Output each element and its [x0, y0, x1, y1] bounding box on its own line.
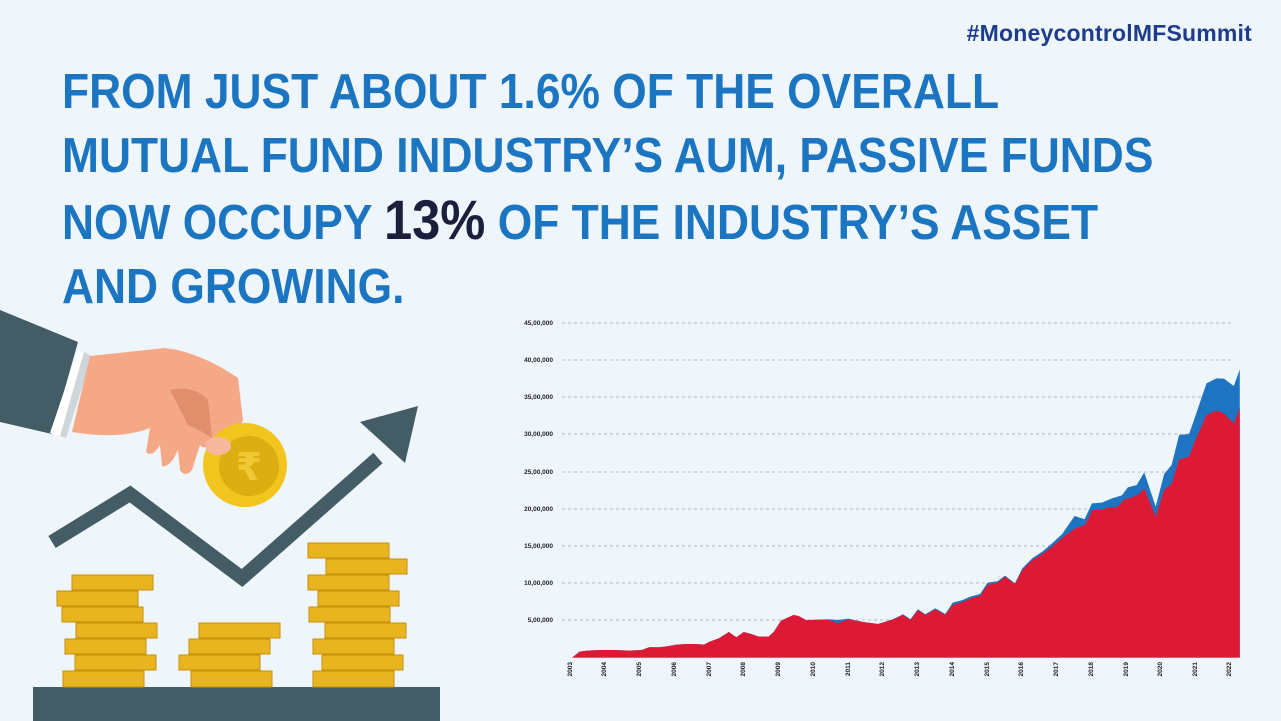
icon: trend arrow	[52, 406, 418, 578]
title: NOW OCCUPY 13% OF THE INDUSTRY’S ASSET	[62, 188, 1098, 251]
x axis labels: 2020	[1157, 662, 1164, 676]
x axis labels: 2011	[845, 662, 852, 676]
y axis labels: 35,00,000	[524, 394, 553, 401]
y axis labels: 25,00,000	[524, 469, 553, 476]
y axis labels: 20,00,000	[524, 506, 553, 513]
x axis labels: 2006	[671, 662, 678, 676]
platform	[33, 687, 440, 721]
x axis labels: 2015	[984, 662, 991, 676]
title: FROM JUST ABOUT 1.6% OF THE OVERALL	[62, 65, 999, 119]
x axis labels: 2019	[1123, 662, 1130, 676]
y axis labels: 45,00,000	[524, 320, 553, 327]
x axis labels: 2003	[567, 662, 574, 676]
x axis labels: 2021	[1192, 662, 1199, 676]
icon: rupee coin	[203, 423, 287, 507]
x axis labels: 2017	[1053, 662, 1060, 676]
y axis labels	[524, 320, 553, 624]
x axis labels: 2008	[740, 662, 747, 676]
y axis labels: 15,00,000	[524, 543, 553, 550]
x axis labels: 2007	[706, 662, 713, 676]
y axis labels: 5,00,000	[528, 617, 553, 624]
passive funds series (blue)	[572, 369, 1240, 658]
x axis labels: 2018	[1088, 662, 1095, 676]
active funds series (red)	[572, 408, 1240, 658]
icon: rupee coin: ₹	[236, 445, 262, 489]
x axis labels: 2012	[879, 662, 886, 676]
title: AND GROWING.	[62, 260, 404, 314]
y axis labels: 30,00,000	[524, 431, 553, 438]
title: MUTUAL FUND INDUSTRY’S AUM, PASSIVE FUNDS	[62, 129, 1153, 183]
area chart	[524, 320, 1240, 676]
y axis labels: 40,00,000	[524, 357, 553, 364]
gridlines	[562, 323, 1231, 620]
sleeve	[0, 310, 78, 434]
x axis labels: 2013	[914, 662, 921, 676]
x axis labels: 2005	[636, 662, 643, 676]
hand	[72, 348, 243, 474]
x axis labels: 2014	[949, 662, 956, 676]
x axis labels: 2016	[1018, 662, 1025, 676]
x axis labels	[567, 662, 1233, 676]
hashtag: #MoneycontrolMFSummit	[967, 20, 1252, 46]
x axis labels: 2004	[601, 662, 608, 676]
x axis labels: 2009	[775, 662, 782, 676]
y axis labels: 10,00,000	[524, 580, 553, 587]
x axis labels: 2010	[810, 662, 817, 676]
x axis labels: 2022	[1226, 662, 1233, 676]
coin stacks	[57, 543, 407, 687]
title	[62, 65, 1153, 314]
illustration: hand, coin, arrow and coin stacks	[0, 310, 440, 721]
